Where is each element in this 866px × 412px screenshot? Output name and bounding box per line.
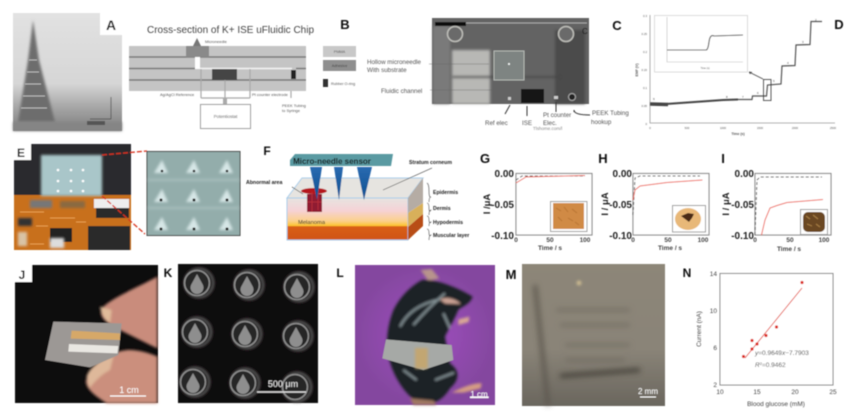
panel B: legend: Rubber O-ring — [331, 82, 355, 86]
panel E: sensor board photo — [14, 144, 131, 250]
label J: J — [19, 268, 25, 282]
chart H: 100 — [698, 237, 709, 244]
needle sensor — [290, 154, 393, 200]
panel C: EMF step chart: 8 — [726, 95, 728, 99]
panel B: chip annotations: ISE — [522, 120, 532, 127]
panel F: skin diagram — [246, 144, 469, 240]
panel F: skin diagram: F — [263, 144, 271, 158]
chart H: I / μA — [600, 192, 611, 216]
panel F: skin diagram: Melanoma — [298, 220, 326, 226]
chart H: 0.00 — [613, 169, 632, 180]
panel A: cross-section diagram: Ag/AgCl Reference — [160, 92, 195, 97]
inset: skin sample — [550, 202, 587, 232]
panel N: calibration scatter plot: =0.9462 — [762, 362, 786, 369]
panel C: EMF step chart: 2 — [815, 18, 817, 22]
panel C: EMF step chart: 0.15 — [642, 68, 647, 72]
panel N: calibration scatter plot: 14 — [710, 271, 717, 278]
panel N: calibration scatter plot: 6 — [713, 345, 717, 352]
chart G: 50 — [546, 237, 554, 244]
cross-section title: Cross-section of K+ ISE uFluidic Chip — [147, 25, 314, 36]
panel C: EMF step chart: 0.2 — [643, 50, 647, 54]
panel F: skin diagram: Epidermis — [433, 190, 458, 196]
chart G: -0.05 — [491, 200, 514, 211]
chart G: 0 — [514, 237, 518, 244]
panel K: microneedle SEM — [178, 264, 318, 403]
chart H: H — [598, 151, 608, 166]
panel J: patch held in fingers — [15, 265, 158, 403]
chart I: -0.10 — [731, 231, 754, 242]
chart I: 0.00 — [735, 169, 754, 180]
panel B: chip photograph — [432, 18, 589, 104]
chart H: -0.05 — [609, 200, 632, 211]
panel C: EMF step chart — [612, 14, 837, 136]
panel B: chip photograph: C — [582, 27, 588, 36]
chart G — [480, 151, 592, 252]
inset: melanoma sample — [800, 210, 828, 234]
panel M: skin photograph: 2 mm — [638, 387, 658, 396]
chart H: -0.10 — [609, 231, 632, 242]
panel C: EMF step chart: C — [612, 18, 622, 33]
panel B: chip annotations — [367, 59, 629, 131]
label K: K — [164, 266, 173, 280]
melanoma lesion — [301, 188, 327, 212]
panel M: skin photograph — [522, 264, 665, 406]
panel J: patch held in fingers: 1 cm — [119, 385, 139, 395]
panel N: calibration scatter plot: 2 — [760, 361, 763, 366]
chart inset — [654, 16, 748, 72]
panel A: cross-section diagram: Microneedle — [205, 39, 228, 44]
panel N: calibration scatter plot: N — [683, 266, 691, 280]
label E: E — [17, 146, 25, 160]
panel N: calibration scatter plot: 10 — [710, 308, 717, 315]
panel C: EMF step chart: 9 — [653, 97, 655, 101]
panel B: chip annotations: Tlshome.com/l — [533, 126, 562, 131]
panel F: skin diagram: Abnormal area — [246, 180, 282, 186]
panel C: EMF step chart: 4 — [787, 61, 789, 65]
panel C: EMF step chart: 1000 — [720, 126, 727, 130]
panel A: needle micrograph — [13, 13, 122, 131]
chart H — [598, 151, 709, 252]
panel F: skin diagram: Muscular layer — [433, 233, 469, 239]
chart G: Time / s — [538, 245, 562, 252]
panel N: calibration scatter plot: Current (nA) — [696, 311, 703, 347]
potentiostat box — [200, 104, 250, 128]
chart G: G — [480, 151, 490, 166]
panel B: chip annotations: With substrate — [367, 67, 407, 74]
panel F: skin diagram: Dermis — [433, 206, 451, 212]
panel N: calibration scatter plot — [683, 266, 837, 408]
chart G: 0.00 — [495, 169, 514, 180]
label A: A — [106, 17, 116, 33]
panel C: EMF step chart: EMF (V) — [635, 63, 639, 77]
label M: M — [506, 267, 516, 282]
panel C: EMF step chart: 5 — [773, 79, 775, 83]
panel B: legend: PMMA — [334, 50, 346, 54]
skin block — [287, 178, 423, 240]
chart G: I /μA — [482, 194, 493, 214]
panel C: EMF step chart: 1500 — [757, 126, 764, 130]
panel A: cross-section diagram: PEEK Tubing — [282, 103, 306, 108]
panel F: skin diagram: Hypodermis — [433, 220, 463, 226]
chart inset: Time (s) — [700, 67, 710, 70]
panel C: EMF step chart: 2000 — [792, 126, 799, 130]
panel N: calibration scatter plot: 15 — [753, 389, 761, 396]
panel B: chip annotations: Elec. — [543, 120, 557, 127]
label L: L — [336, 266, 344, 280]
panel B: chip annotations: hookup — [591, 119, 612, 126]
panel C: EMF step chart: 0.3 — [643, 14, 647, 18]
chart H: 0 — [631, 237, 635, 244]
chart H: 50 — [664, 237, 672, 244]
panel C: EMF step chart: 0.25 — [642, 32, 647, 36]
panel E: needle array close-up — [147, 152, 240, 236]
panel C: EMF step chart: Time (s) — [731, 132, 745, 136]
chart I: I / μA — [721, 192, 732, 216]
panel N: calibration scatter plot: R — [755, 362, 760, 369]
panel C: EMF step chart: 0.05 — [642, 104, 647, 108]
panel B: chip annotations: Ref elec — [485, 120, 508, 127]
zoom indicator lines — [102, 151, 147, 234]
panel B: legend: Adhesive — [332, 64, 347, 68]
panel B: legend: B — [340, 17, 350, 32]
panel B: legend — [323, 17, 356, 87]
panel C: EMF step chart: 0.1 — [643, 86, 647, 90]
label J — [15, 265, 32, 282]
chart H: Time / s — [658, 245, 682, 252]
chart I: 0 — [753, 237, 757, 244]
panel C: EMF step chart: 0 — [645, 122, 647, 126]
needle sensor: Micro-needle sensor — [293, 157, 371, 166]
panel F: skin diagram: Stratum corneum — [409, 160, 452, 166]
label D: D — [834, 17, 844, 32]
potentiostat box: Potentiostat — [214, 114, 238, 119]
panel C: EMF step chart: 3 — [802, 40, 804, 44]
chart G: -0.10 — [491, 231, 514, 242]
panel B: chip annotations: Hollow microneedle — [367, 59, 422, 66]
panel A: cross-section diagram — [129, 25, 314, 128]
chart I: 100 — [819, 237, 830, 244]
panel C: EMF step chart: 7 — [742, 95, 744, 99]
panel C: EMF step chart: 0 — [649, 126, 651, 130]
panel N: calibration scatter plot: 2 — [713, 382, 717, 389]
chart I — [721, 151, 831, 253]
chart I: 50 — [786, 237, 794, 244]
panel L: mouse wearing patch: 1 cm — [470, 390, 488, 399]
panel N: calibration scatter plot: 25 — [829, 389, 837, 396]
panel N: calibration scatter plot: 10 — [716, 389, 724, 396]
panel N: calibration scatter plot: y=0.9649x−7.7903 — [754, 350, 809, 357]
panel B: chip annotations: PEEK Tubing — [592, 110, 629, 117]
chart I: I — [721, 151, 725, 166]
chart I: -0.05 — [731, 200, 754, 211]
panel C: EMF step chart: 2500 — [830, 126, 837, 130]
panel C: EMF step chart: 500 — [685, 126, 690, 130]
inset: lesion sample — [672, 206, 706, 232]
chart G: 100 — [580, 237, 591, 244]
panel C: EMF step chart: 6 — [757, 91, 759, 95]
panel B: chip annotations: Fluidic channel — [381, 88, 422, 95]
panel K: microneedle SEM: 500 μm — [268, 379, 298, 389]
panel A: cross-section diagram: Pt counter electrode — [252, 92, 289, 97]
chart I: Time / s — [777, 246, 801, 253]
panel N: calibration scatter plot: Blood glucose (mM) — [747, 401, 805, 408]
panel B: chip annotations: Pt counter — [543, 112, 571, 119]
panel N: calibration scatter plot: 20 — [791, 389, 799, 396]
panel L: mouse wearing patch — [355, 265, 495, 405]
panel A: cross-section diagram: to Syringe — [282, 108, 301, 113]
